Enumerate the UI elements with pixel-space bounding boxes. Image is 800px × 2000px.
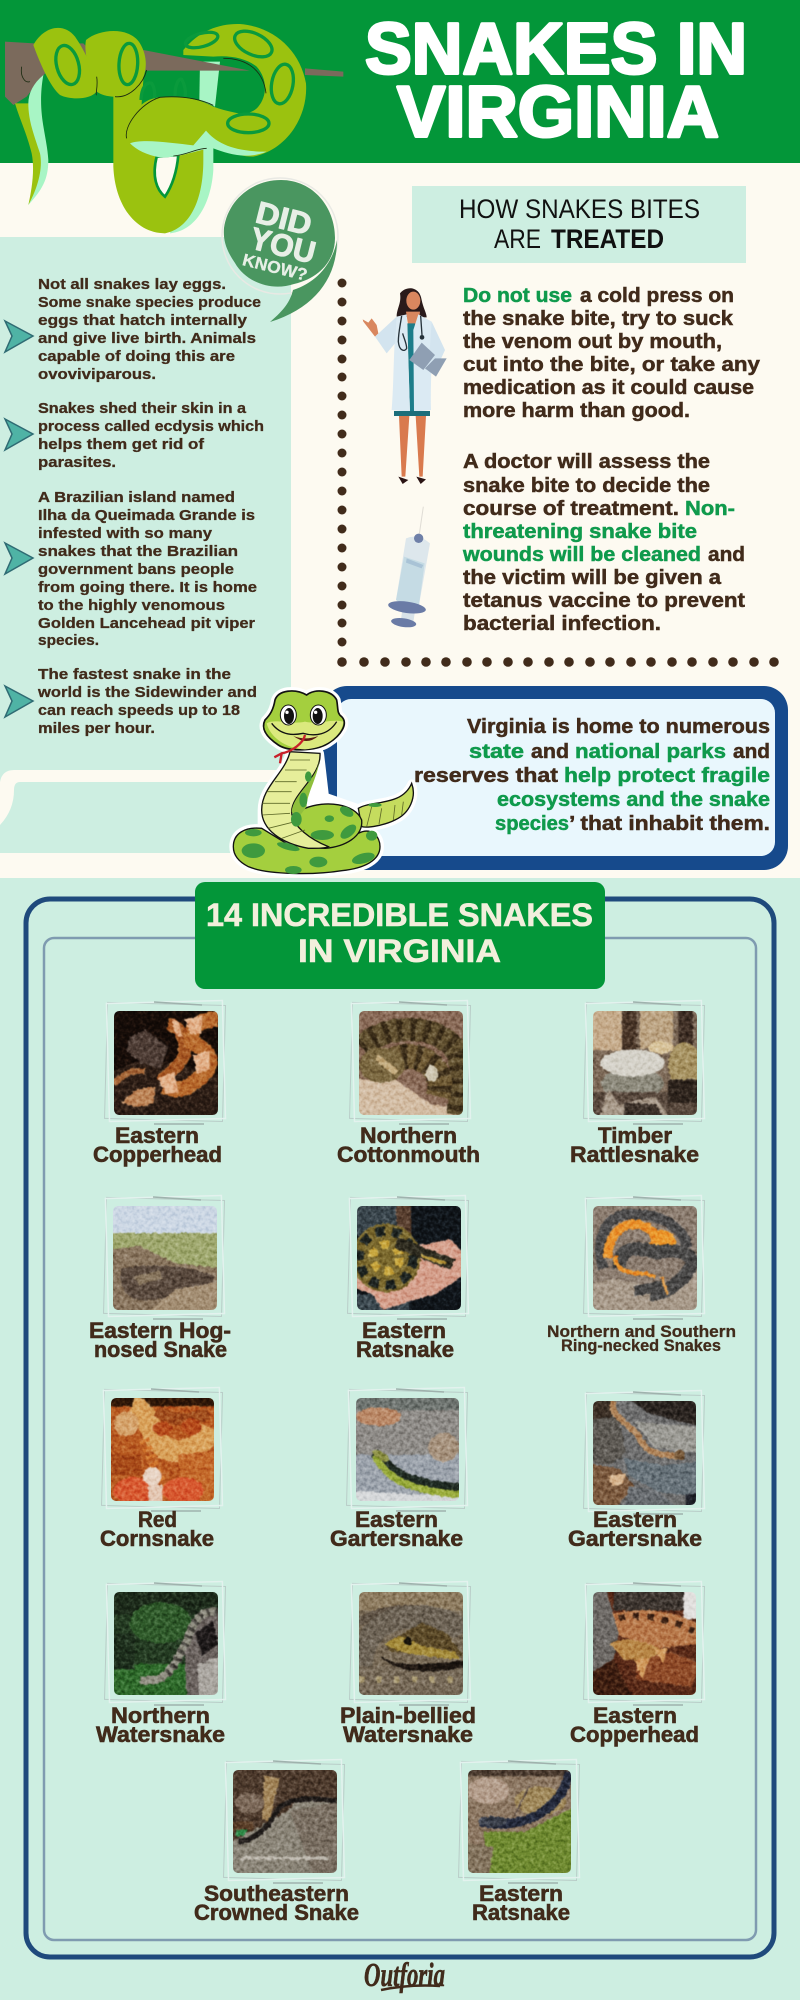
snake card: Northern Cottonmouth	[337, 1001, 480, 1167]
text block: fact 2	[38, 400, 264, 471]
text block: fact 3: government bans people	[38, 561, 234, 578]
snake card: Northern Watersnake	[96, 1582, 226, 1747]
text block: fact 3: to the highly venomous	[38, 597, 225, 614]
snake card: Eastern Gartersnake (brown)	[568, 1391, 705, 1551]
text block: do not use: cut into the bite, or take any	[463, 354, 761, 376]
name	[570, 1703, 699, 1747]
text block: fact 2: process called ecdysis which	[38, 418, 264, 435]
snake card: Eastern Copperhead (2)	[570, 1582, 705, 1747]
photo: eastern ratsnake on moss	[468, 1770, 571, 1873]
snake card: Eastern Ratsnake (2)	[459, 1760, 580, 1925]
text block: do not use: Do not use	[463, 285, 572, 307]
callout bubble: did you know	[222, 178, 338, 322]
name	[570, 1123, 699, 1167]
name: Eastern	[593, 1507, 677, 1532]
name: Rattlesnake	[570, 1142, 699, 1167]
logo: Outforia	[364, 1957, 445, 1994]
text block: doctor assessment: Non-	[685, 498, 735, 520]
panel: virginia callout: and	[531, 741, 569, 763]
name: Eastern	[115, 1123, 199, 1148]
icon: cartoon snake mascot	[233, 691, 413, 874]
photo: northern watersnake	[114, 1592, 218, 1695]
panel: virginia callout: Virginia is home to numerous	[467, 716, 770, 738]
heading: 14 incredible snakes: IN VIRGINIA	[298, 933, 501, 969]
name	[547, 1322, 736, 1355]
heading: 14 incredible snakes: 14 INCREDIBLE SNAKES	[206, 897, 593, 933]
name: Eastern Hog-	[89, 1318, 231, 1343]
arrow icon	[5, 543, 33, 574]
header band	[0, 0, 800, 163]
photo: northern cottonmouth	[359, 1011, 463, 1115]
snake card: Southeastern Crowned Snake	[194, 1760, 359, 1925]
photo: red cornsnake	[111, 1398, 214, 1501]
name: Copperhead	[570, 1722, 699, 1747]
photo: eastern gartersnake	[356, 1398, 459, 1501]
name: Eastern	[362, 1318, 446, 1343]
text block: fact 3: A Brazilian island named	[38, 489, 235, 506]
snake card: Red Cornsnake	[100, 1388, 223, 1551]
callout bubble: did you know: YOU	[247, 221, 319, 270]
logo: Outforia: Outforia	[364, 1957, 445, 1994]
text block: doctor assessment: A doctor will assess the	[463, 451, 710, 473]
arrow icon	[5, 686, 33, 717]
photo: timber rattlesnake	[593, 1011, 697, 1115]
text block: doctor assessment: bacterial infection.	[463, 613, 661, 635]
name: Gartersnake	[330, 1526, 463, 1551]
text block: doctor assessment: and	[708, 544, 745, 566]
snake card: Eastern Hog-nosed Snake	[89, 1196, 231, 1362]
photo: ring-necked snake	[593, 1206, 697, 1310]
name: Watersnake	[96, 1722, 225, 1747]
panel: virginia callout: species	[495, 813, 569, 835]
icon: syringe	[387, 507, 430, 629]
panel: virginia callout: reserves that	[414, 765, 558, 787]
arrow icon	[5, 419, 33, 450]
callout bubble: did you know: DID	[252, 195, 315, 242]
name: Eastern	[593, 1703, 677, 1728]
name: Northern and Southern	[547, 1322, 736, 1341]
text block: fact 1: ovoviviparous.	[38, 366, 156, 383]
title	[365, 10, 747, 152]
name	[93, 1123, 222, 1167]
text block: fact 1: and give live birth. Animals	[38, 330, 256, 347]
photo: eastern copperhead close-up	[593, 1592, 696, 1695]
text block: fact 3: infested with so many	[38, 525, 213, 542]
text block: fact 1	[38, 276, 261, 383]
text block: fact 3	[38, 489, 257, 649]
dotted divider	[337, 278, 779, 667]
name	[472, 1881, 570, 1925]
name: Cottonmouth	[337, 1142, 480, 1167]
snake card: Northern and Southern Ring-necked Snakes	[547, 1196, 736, 1355]
text block: fact 3: species.	[38, 632, 99, 649]
text block: doctor assessment: tetanus vaccine to prevent	[463, 590, 745, 612]
text block: doctor assessment: threatening snake bite	[463, 521, 697, 543]
panel: virginia callout: ’ that inhabit them.	[569, 813, 770, 835]
name	[337, 1123, 480, 1167]
name: Ratsnake	[472, 1900, 570, 1925]
panel: virginia callout: ecosystems and the snake	[497, 789, 770, 811]
text block: doctor assessment: course of treatment.	[463, 498, 679, 520]
text block: fact 2: Snakes shed their skin in a	[38, 400, 247, 417]
name: Timber	[598, 1123, 672, 1148]
text block: fact 3: snakes that the Brazilian	[38, 543, 238, 560]
name: Watersnake	[343, 1722, 473, 1747]
text block: fact 2: parasites.	[38, 454, 116, 471]
name: Northern	[111, 1703, 210, 1728]
photo: eastern copperhead	[114, 1011, 218, 1115]
text block: do not use	[463, 285, 761, 422]
text block: doctor assessment: snake bite to decide the	[463, 475, 710, 497]
photo: plain-bellied watersnake	[359, 1592, 463, 1695]
name	[96, 1703, 225, 1747]
heading: how snakes bites are treated: ARE	[494, 224, 541, 254]
text block: fact 4: world is the Sidewinder and	[37, 684, 257, 701]
photo: brown snake on rock	[593, 1401, 696, 1505]
name	[330, 1507, 463, 1551]
photo: eastern hog-nosed snake	[113, 1206, 217, 1310]
text block: fact 4: can reach speeds up to 18	[38, 702, 240, 719]
name: Ring-necked Snakes	[561, 1336, 721, 1355]
name: Northern	[360, 1123, 457, 1148]
heading: how snakes bites are treated	[412, 186, 746, 263]
panel: virginia callout: national parks	[575, 741, 726, 763]
snake card: Eastern Copperhead	[93, 1001, 226, 1167]
text block: do not use: a cold press on	[580, 285, 734, 307]
heading: 14 incredible snakes	[195, 882, 605, 989]
text block: fact 1: Some snake species produce	[38, 294, 261, 311]
panel: virginia callout: help protect fragile	[564, 765, 770, 787]
name	[356, 1318, 454, 1362]
panel: bottom snakes section background	[0, 878, 800, 2000]
text block: do not use: the venom out by mouth,	[463, 331, 722, 353]
photo: southeastern crowned snake	[233, 1770, 337, 1873]
callout bubble: did you know: KNOW?	[241, 250, 309, 285]
snake card: Eastern Ratsnake	[348, 1196, 469, 1362]
title: VIRGINIA	[397, 72, 719, 152]
name	[194, 1881, 359, 1925]
name: Ratsnake	[356, 1337, 454, 1362]
name	[89, 1318, 231, 1362]
text block: do not use: more harm than good.	[463, 400, 690, 422]
panel: inner frame	[44, 938, 756, 1940]
panel: outer frame	[26, 899, 774, 1957]
text block: do not use: the snake bite, try to suck	[463, 308, 734, 330]
snake card: Timber Rattlesnake	[570, 1001, 705, 1167]
name	[100, 1507, 214, 1551]
text block: do not use: medication as it could cause	[463, 377, 754, 399]
name: Red	[138, 1507, 177, 1532]
panel: virginia callout: and	[733, 741, 770, 763]
photo: ball python in hand	[357, 1206, 461, 1310]
text block: fact 1: Not all snakes lay eggs.	[38, 276, 226, 293]
snake card: Eastern Gartersnake	[330, 1388, 468, 1551]
text block: doctor assessment	[462, 451, 745, 635]
text block: fact 4: The fastest snake in the	[38, 666, 231, 683]
title: SNAKES IN	[365, 10, 747, 90]
icon: header snake on branch	[5, 24, 343, 233]
name: Cornsnake	[100, 1526, 214, 1551]
name: Eastern	[479, 1881, 563, 1906]
icon: doctor	[363, 288, 447, 484]
text block: fact 1: capable of doing this are	[38, 348, 235, 365]
heading: how snakes bites are treated: TREATED	[551, 224, 664, 254]
panel: virginia callout: state	[469, 741, 524, 763]
text block: fact 3: from going there. It is home	[38, 579, 257, 596]
text block: fact 3: Ilha da Queimada Grande is	[38, 507, 255, 524]
snake card: Plain-bellied Watersnake	[340, 1582, 476, 1747]
text block: doctor assessment: wounds will be cleaned	[462, 544, 701, 566]
heading: how snakes bites are treated: HOW SNAKES BITES	[459, 194, 700, 224]
text block: fact 4: miles per hour.	[38, 720, 155, 737]
text block: doctor assessment: the victim will be given a	[463, 567, 722, 589]
text block: fact 2: helps them get rid of	[38, 436, 205, 453]
text block: fact 1: eggs that hatch internally	[38, 312, 248, 329]
name: Gartersnake	[568, 1526, 702, 1551]
arrow icon	[5, 321, 33, 352]
name: Eastern	[355, 1507, 438, 1532]
name: Copperhead	[93, 1142, 222, 1167]
panel: did you know background	[0, 237, 291, 853]
name	[340, 1703, 476, 1747]
name: Southeastern	[204, 1881, 349, 1906]
text block: fact 3: Golden Lancehead pit viper	[38, 615, 255, 632]
panel: virginia callout	[323, 686, 788, 870]
name: Plain-bellied	[340, 1703, 476, 1728]
text block: fact 4	[37, 666, 257, 737]
name	[568, 1507, 702, 1551]
name: nosed Snake	[94, 1337, 227, 1362]
name: Crowned Snake	[194, 1900, 359, 1925]
